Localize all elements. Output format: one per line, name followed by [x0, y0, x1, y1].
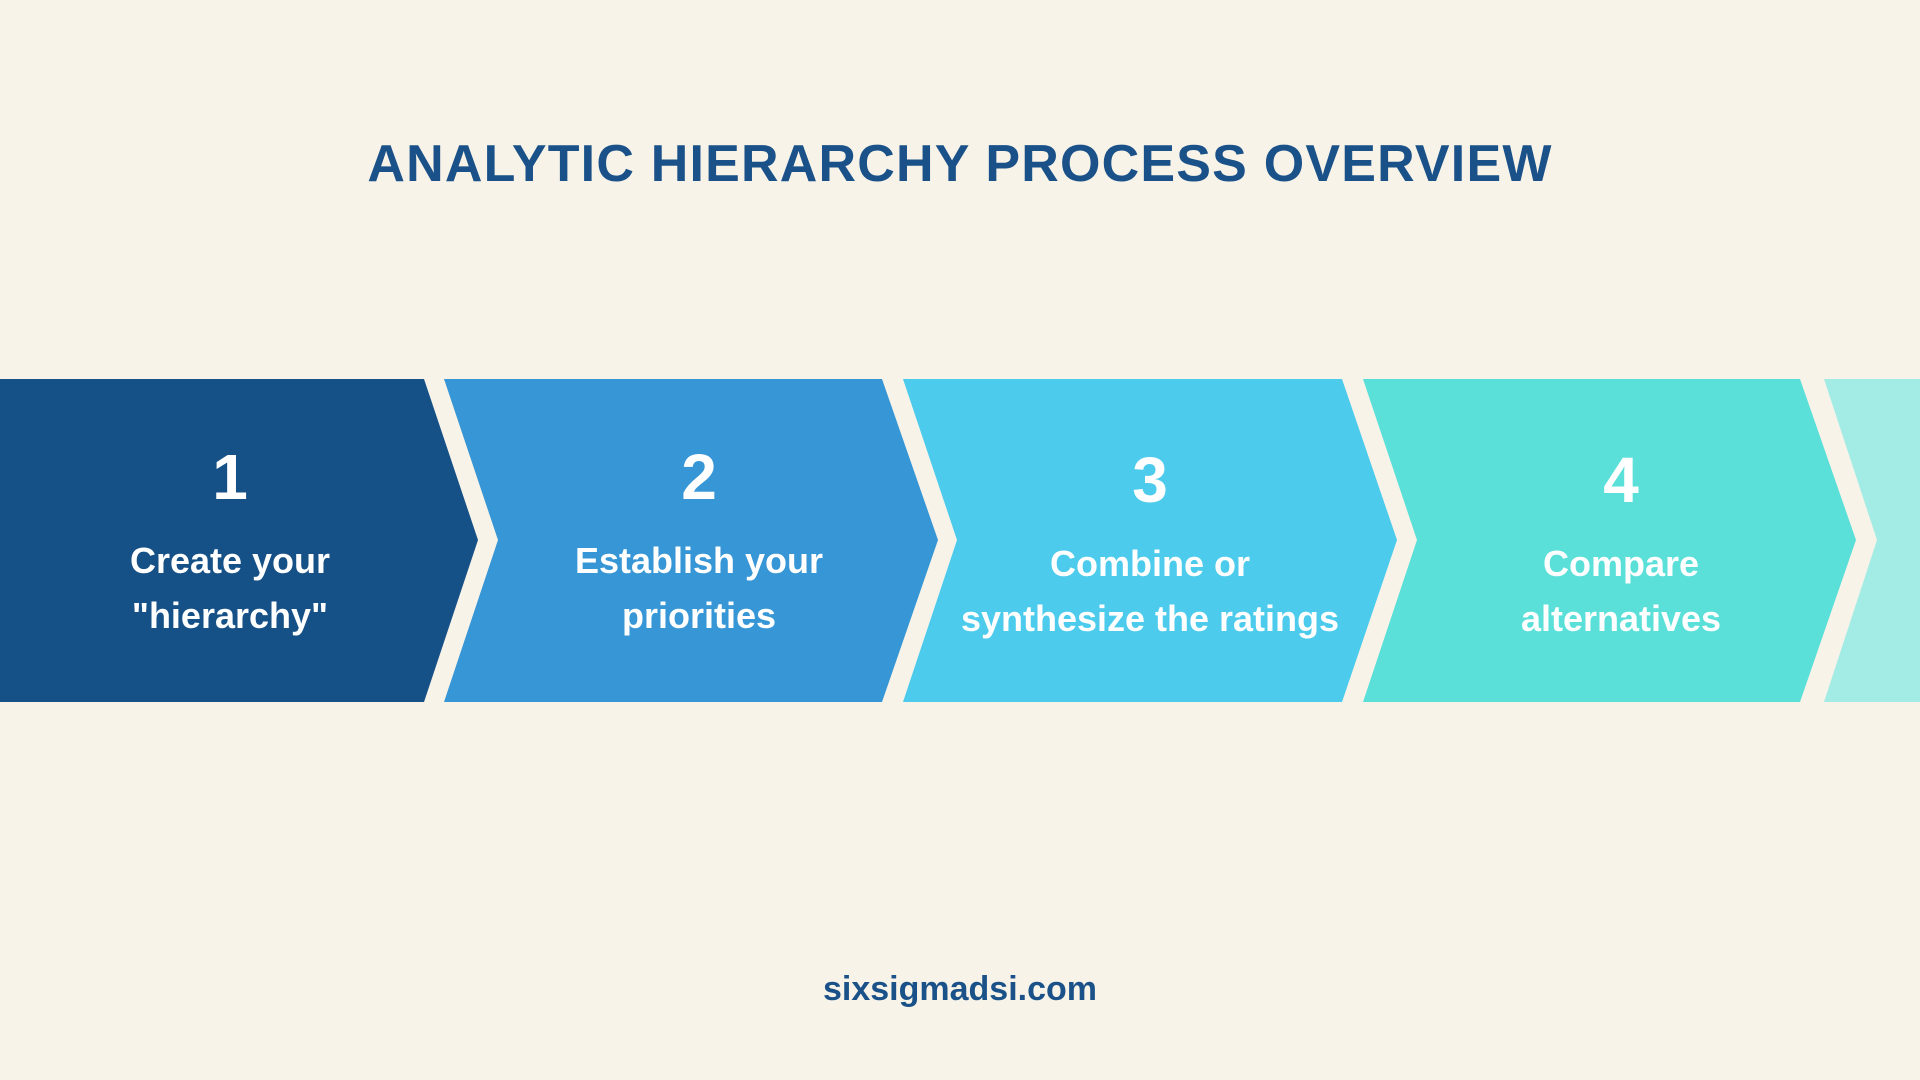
chevron 4: [1363, 379, 1856, 702]
step 3 text: 3: [1132, 444, 1168, 516]
title: ANALYTIC HIERARCHY PROCESS OVERVIEW: [367, 135, 1553, 193]
step 1 text: Create your: [130, 540, 330, 581]
chevron 2: [444, 379, 938, 702]
step 3 text: synthesize the ratings: [961, 598, 1339, 639]
chevron 5: [1824, 379, 1920, 702]
footer url: sixsigmadsi.com: [823, 970, 1097, 1008]
step 3 text: [961, 444, 1339, 639]
step 2 text: Establish your: [575, 540, 823, 581]
step 2 text: 2: [681, 441, 717, 513]
step 4 text: alternatives: [1521, 598, 1721, 639]
step 1 text: "hierarchy": [132, 595, 328, 636]
step 1 text: [130, 441, 330, 636]
step 4 text: Compare: [1543, 543, 1699, 584]
step 1 text: 1: [212, 441, 248, 513]
step 2 text: priorities: [622, 595, 776, 636]
step 4 text: [1521, 444, 1721, 639]
step 2 text: [575, 441, 823, 636]
chevron 1: [0, 379, 478, 702]
step 4 text: 4: [1603, 444, 1639, 516]
chevron 3: [903, 379, 1397, 702]
step 3 text: Combine or: [1050, 543, 1250, 584]
